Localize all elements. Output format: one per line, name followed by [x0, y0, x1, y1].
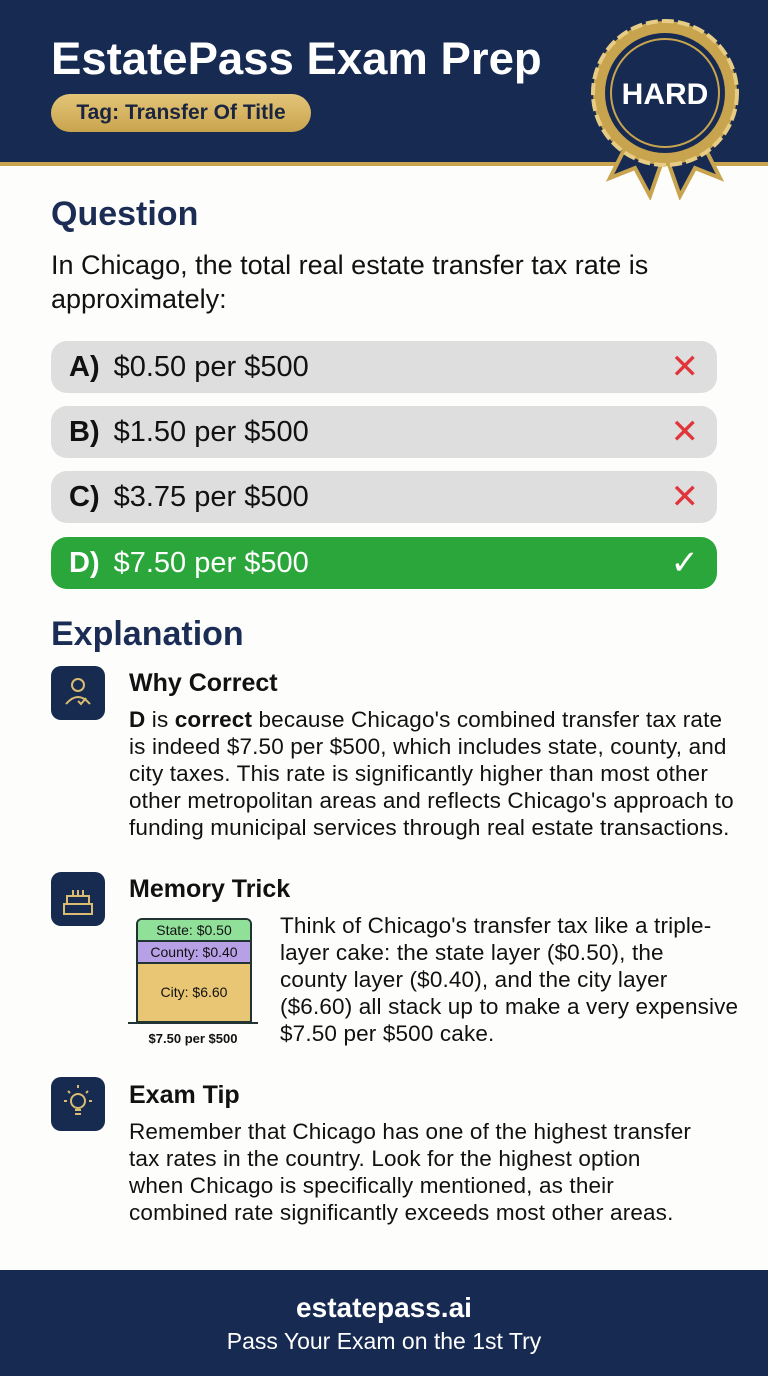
cake diagram: State: $0.50 [156, 922, 232, 938]
footer brand: estatepass.ai [296, 1292, 472, 1323]
option D correct: D) $7.50 per $500 [69, 547, 309, 579]
explanation heading: Explanation [51, 615, 244, 653]
why correct text [129, 707, 734, 840]
exam tip heading: Exam Tip [129, 1081, 240, 1109]
memory trick text: ($6.60) all stack up to make a very expensive [280, 994, 738, 1019]
option A: ✕ [670, 348, 699, 386]
exam tip text: tax rates in the country. Look for the highest option [129, 1146, 641, 1171]
why correct heading: Why Correct [129, 669, 278, 697]
memory trick text: Think of Chicago's transfer tax like a triple- [280, 913, 711, 938]
exam tip text [129, 1119, 691, 1225]
badge: HARD [591, 19, 739, 200]
title: EstatePass Exam Prep [51, 33, 542, 84]
cake diagram: City: $6.60 [161, 984, 227, 1000]
why correct text: other metropolitan areas and reflects Chicago's approach to [129, 788, 734, 813]
question heading: Question [51, 195, 198, 233]
why correct text: is indeed $7.50 per $500, which includes state, county, and [129, 734, 727, 759]
footer [0, 1270, 768, 1376]
option B: B) $1.50 per $500 [69, 416, 309, 448]
cake diagram: $7.50 per $500 [149, 1031, 237, 1046]
option C [51, 471, 717, 523]
icon: lightbulb [51, 1077, 105, 1131]
badge: HARD: HARD [622, 78, 708, 111]
memory trick heading: Memory Trick [129, 875, 290, 903]
memory trick text: layer cake: the state layer ($0.50), the [280, 940, 664, 965]
option D correct [51, 537, 717, 589]
option D correct: ✓ [670, 544, 699, 582]
memory trick text: $7.50 per $500 cake. [280, 1021, 494, 1046]
icon: person check [51, 666, 105, 720]
cake diagram [128, 918, 258, 1046]
option B: ✕ [670, 413, 699, 451]
why correct text: city taxes. This rate is significantly higher than most other [129, 761, 708, 786]
exam tip text: Remember that Chicago has one of the highest transfer [129, 1119, 691, 1144]
icon: cake [51, 872, 105, 926]
tag pill: Tag: Transfer Of Title [76, 101, 286, 124]
option C: C) $3.75 per $500 [69, 481, 309, 513]
footer tagline: Pass Your Exam on the 1st Try [227, 1328, 541, 1354]
option A: A) $0.50 per $500 [69, 351, 309, 383]
tag pill [51, 94, 311, 132]
header [0, 0, 768, 166]
exam tip text: when Chicago is specifically mentioned, as their [129, 1173, 614, 1198]
memory trick text [280, 913, 738, 1046]
why correct text: funding municipal services through real estate transactions. [129, 815, 730, 840]
option A [51, 341, 717, 393]
question text: In Chicago, the total real estate transfer tax rate is approximately: [51, 250, 648, 314]
exam tip text: combined rate significantly exceeds most other areas. [129, 1200, 673, 1225]
why correct text: D is correct because Chicago's combined transfer tax rate [129, 707, 722, 732]
cake diagram: County: $0.40 [150, 944, 238, 960]
memory trick text: county layer ($0.40), and the city layer [280, 967, 667, 992]
option B [51, 406, 717, 458]
option C: ✕ [670, 478, 699, 516]
